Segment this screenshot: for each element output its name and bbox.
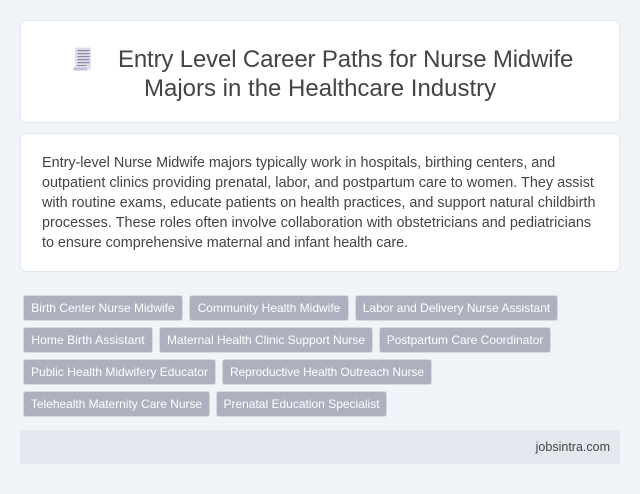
tag: Home Birth Assistant: [31, 333, 145, 347]
tag: [23, 359, 216, 385]
description text: to ensure comprehensive maternal and infant health care.: [42, 235, 408, 251]
title: [118, 46, 573, 102]
header panel: [20, 20, 620, 123]
tag: [23, 327, 153, 353]
tag: Community Health Midwife: [198, 301, 340, 315]
tag: Public Health Midwifery Educator: [31, 365, 208, 379]
tag: Prenatal Education Specialist: [223, 397, 380, 411]
tag: [355, 295, 558, 321]
tag: Postpartum Care Coordinator: [387, 333, 543, 347]
tag: [159, 327, 373, 353]
tag: [216, 391, 387, 417]
title: Entry Level Career Paths for Nurse Midwife: [118, 46, 573, 73]
tag: [379, 327, 551, 353]
tag: Maternal Health Clinic Support Nurse: [167, 333, 365, 347]
career tags: [23, 295, 558, 417]
tag: [23, 295, 183, 321]
footer bar: [20, 430, 620, 464]
tag: Birth Center Nurse Midwife: [31, 301, 175, 315]
description text: processes. These roles often involve collaboration with obstetricians and pediatricians: [42, 215, 591, 231]
title: Majors in the Healthcare Industry: [144, 75, 496, 102]
tag: [189, 295, 349, 321]
icon: document scroll: [73, 48, 91, 70]
description text: with routine exams, educate patients on health practices, and support natural childbirth: [42, 195, 595, 211]
description panel: [20, 133, 620, 272]
footer site name: jobsintra.com: [536, 440, 610, 454]
tag: Telehealth Maternity Care Nurse: [31, 397, 202, 411]
description text: Entry-level Nurse Midwife majors typically work in hospitals, birthing centers, and: [42, 155, 555, 171]
tag: [222, 359, 432, 385]
tag: Reproductive Health Outreach Nurse: [230, 365, 424, 379]
description text: [42, 155, 595, 251]
tag: Labor and Delivery Nurse Assistant: [363, 301, 550, 315]
tag: [23, 391, 210, 417]
description text: outpatient clinics providing prenatal, labor, and postpartum care to women. They assist: [42, 175, 594, 191]
